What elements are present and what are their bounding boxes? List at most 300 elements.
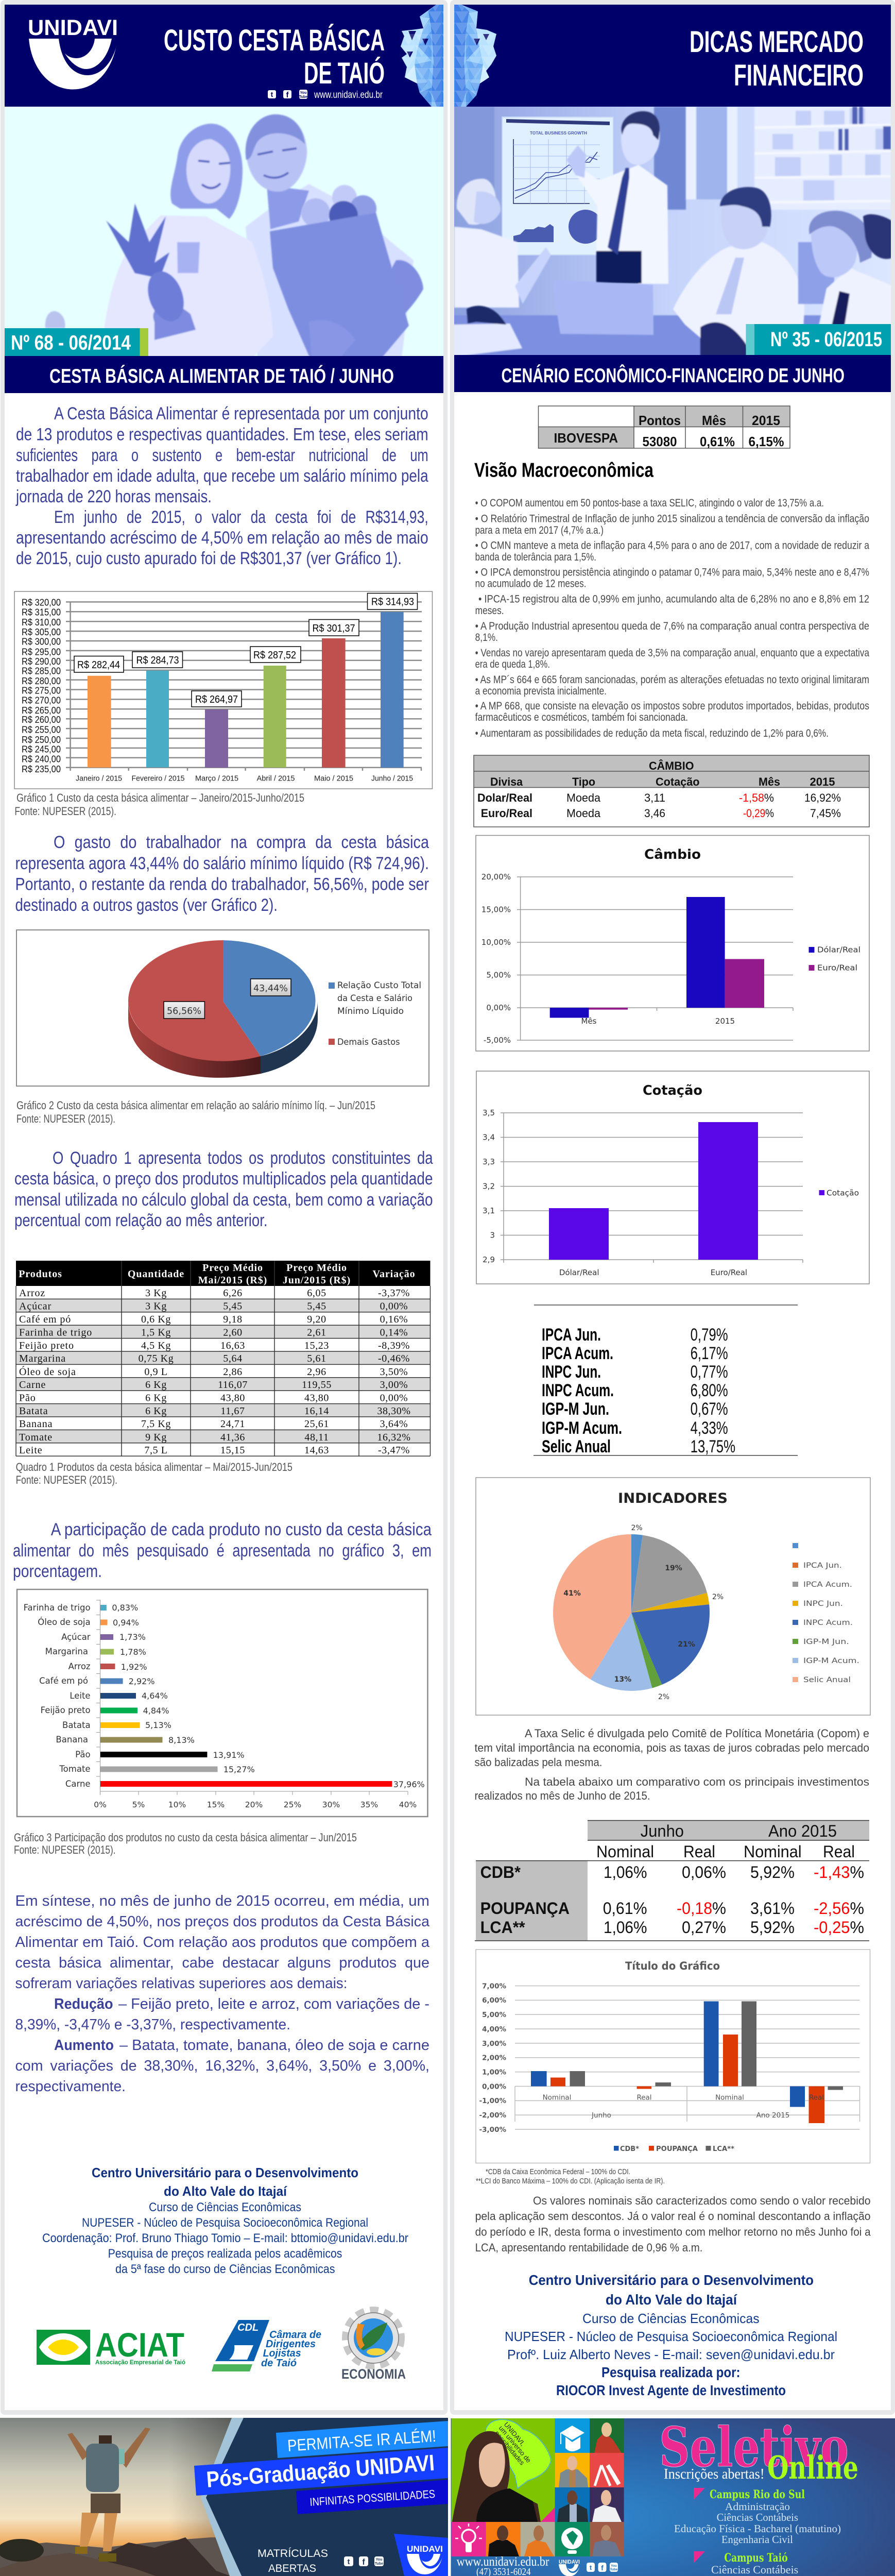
chart: indicadores pie: IGP-M Acum. (803, 1657, 859, 1665)
icons: social small: f (601, 2564, 604, 2572)
chart: custo da cesta básica: R$ 282,44 (77, 659, 120, 671)
table: investimentos: -2,56% (814, 1899, 864, 1918)
chart: participação dos produtos: 0,94% (113, 1618, 139, 1628)
social icons and site: Tube (299, 95, 307, 99)
logo: CDL: Lojistas (263, 2348, 301, 2359)
table: produtos da cesta básica: 0,14% (380, 1327, 408, 1338)
speech bubble: UNIDAVI, (503, 2420, 527, 2447)
text block: valores nominais: LCA, apresentando rentabilidade de 0,96 % a.m. (475, 2241, 702, 2254)
title: seletivo online: Online (767, 2449, 858, 2486)
text block: valores nominais: do período e IR, desta forma o investimento com melhor retorno no mês Junho foi a (475, 2226, 871, 2238)
table: produtos da cesta básica: -8,39% (378, 1340, 410, 1351)
chart: indicadores pie: 21% (678, 1640, 695, 1649)
logo: CDL: de Taió (261, 2358, 297, 2369)
table: câmbio: 3,11 (644, 791, 665, 804)
table: produtos da cesta básica: 6 Kg (145, 1392, 167, 1403)
credits right: RIOCOR Invest Agente de Investimento (556, 2382, 786, 2398)
text block: gasto do trabalhador: O gasto do trabalhador na compra da cesta básica (54, 833, 429, 852)
table: produtos da cesta básica: 41,36 (220, 1432, 245, 1443)
table: investimentos: 1,06% (604, 1918, 647, 1937)
table: produtos da cesta básica: Quantidade (128, 1268, 184, 1280)
chart: título do gráfico: 1,00% (482, 2068, 506, 2076)
text block: participação: A participação de cada produto no custo da cesta básica (51, 1520, 432, 1539)
text block: participação (13, 1520, 432, 1581)
logo: unidavi blue (394, 2534, 448, 2576)
chart: custo da cesta básica: R$ 315,00 (22, 607, 61, 617)
chart: participação dos produtos (17, 1589, 427, 1817)
credits left: Pesquisa de preços realizada pelos acadêmicos (108, 2247, 342, 2261)
table: produtos da cesta básica: Produtos (19, 1268, 62, 1280)
table: produtos da cesta básica: 24,71 (220, 1418, 245, 1430)
triangle mosaic right (454, 5, 496, 107)
text block: síntese: acréscimo de 4,50%, nos preços dos produtos da Cesta Básica (15, 1913, 430, 1930)
chart: participação dos produtos: Óleo de soja (38, 1617, 91, 1627)
text block: participação: alimentar do mês pesquisado é apresentada no gráfico 3, em (13, 1541, 432, 1561)
chart: título do gráfico: LCA** (713, 2145, 734, 2153)
chart: câmbio: 20,00% (481, 872, 511, 882)
table: produtos da cesta básica: 3 Kg (145, 1300, 167, 1312)
window and columns (454, 107, 737, 210)
heading: visão macroeconômica: Visão Macroeconômica (474, 460, 653, 481)
table: produtos da cesta básica: -3,47% (378, 1445, 410, 1456)
text block: gasto do trabalhador: representa agora 43,44% do salário mínimo líquido (R$ 724,96). (15, 854, 429, 873)
table: produtos da cesta básica: Jun/2015 (R$) (283, 1275, 351, 1286)
table: indicadores: 4,33% (691, 1418, 728, 1438)
big portrait (452, 2431, 555, 2522)
chart: participação dos produtos: 1,78% (120, 1647, 146, 1657)
caption: gráfico 3: Gráfico 3 Participação dos produtos no custo da cesta básica alimentar – Jun/2015 (14, 1831, 357, 1844)
campus taió: Ciências Contábeis (711, 2563, 798, 2576)
contact: www.unidavi.edu.br (457, 2555, 549, 2569)
table: câmbio: Moeda (566, 791, 601, 804)
text block: intro: de 13 produtos e respectivas quantidades. Em tese, eles seriam (16, 425, 428, 444)
triangle mosaic left (401, 5, 443, 107)
text block: valores nominais: pela aplicação sem descontos. Já o valor real é o nominal descontando a inflação (475, 2210, 871, 2223)
table: produtos da cesta básica: 5,61 (307, 1353, 326, 1364)
chart: indicadores pie: INPC Jun. (803, 1600, 843, 1608)
logo UNIDAVI: UNIDAVI (28, 15, 118, 40)
chart: participação dos produtos: 10% (168, 1800, 186, 1809)
campus rio do sul: Engenharia Civil (721, 2533, 793, 2546)
chart: participação dos produtos: Tomate (59, 1764, 91, 1774)
logo: ACIAT (37, 2326, 185, 2366)
chart: custo da cesta básica: R$ 295,00 (22, 647, 61, 657)
section heading (5, 356, 443, 393)
text block: quadro 1 (14, 1148, 433, 1230)
table: câmbio: Dolar/Real (477, 791, 532, 804)
chart: cotação: 3,2 (483, 1182, 495, 1191)
table: investimentos: 1,06% (604, 1863, 647, 1882)
text block: síntese: cesta básica alimentar, cabe destacar alguns produtos que (15, 1955, 429, 1971)
chart: cotação (476, 1071, 869, 1284)
text block: quadro 1: mensal utilizada no cálculo global da cesta, bem como a variação (14, 1190, 433, 1210)
table: produtos da cesta básica: 3,64% (380, 1418, 408, 1430)
table: produtos da cesta básica: 15,23 (304, 1340, 329, 1351)
table: produtos da cesta básica: Açúcar (19, 1300, 51, 1312)
credits right: Curso de Ciências Econômicas (582, 2311, 760, 2326)
table: produtos da cesta básica: 48,11 (304, 1432, 329, 1443)
bullet list: para a meta em 2017 (4,7% a.a.) (475, 524, 604, 536)
text block: intro: trabalhador em idade adulta, que recebe um salário mínimo pela (16, 466, 428, 486)
chart: cotação: 3,1 (483, 1206, 495, 1215)
credits left: Coordenação: Prof. Bruno Thiago Tomio – E-mail: bttomio@unidavi.edu.br (42, 2231, 408, 2245)
chart: cotação: 3,5 (483, 1108, 495, 1117)
chart: custo da cesta básica: Maio / 2015 (314, 774, 353, 783)
social icons and site (268, 90, 383, 100)
chart: título do gráfico: Real (636, 2094, 652, 2102)
table: ibovespa: 6,15% (749, 434, 784, 449)
chart: participação dos produtos: 4,64% (142, 1691, 168, 1701)
chart: título do gráfico: 6,00% (482, 1996, 506, 2005)
chart: título do gráfico (476, 1950, 870, 2163)
chart: custo da cesta básica: R$ 265,00 (22, 705, 61, 716)
chart: custo da cesta básica: R$ 300,00 (22, 637, 61, 647)
caption: quadro 1: Quadro 1 Produtos da cesta básica alimentar – Mai/2015-Jun/2015 (16, 1461, 292, 1473)
table: investimentos: Nominal (744, 1842, 802, 1861)
text: matrículas abertas: ABERTAS (268, 2563, 316, 2574)
table: produtos da cesta básica: Batata (19, 1405, 48, 1417)
chart: câmbio: Mês (581, 1016, 597, 1026)
table: indicadores: IPCA Jun. (542, 1325, 601, 1345)
table: produtos da cesta básica: Feijão preto (19, 1340, 74, 1351)
text block: síntese: sofreram variações relativas superiores aos demais: (15, 1975, 347, 1992)
icons: social (344, 2556, 384, 2567)
chart: título do gráfico: -3,00% (479, 2126, 506, 2134)
chart: participação dos produtos: Café em pó (39, 1676, 88, 1686)
caption: gráfico 1: Fonte: NUPESER (2015). (14, 805, 116, 818)
bullet list: a economia prevista inicialmente. (475, 685, 607, 697)
chart: participação dos produtos: Carne (65, 1779, 91, 1789)
icons: social: f (362, 2558, 365, 2567)
credits right: Pesquisa realizada por: (601, 2364, 741, 2380)
chart: custo da cesta básica: Fevereiro / 2015 (132, 774, 184, 783)
caption: gráfico 3 (14, 1831, 357, 1856)
text block: quadro 1: percentual com relação ao mês anterior. (14, 1211, 268, 1230)
text block: taxa selic: tem vital importância na economia, pois as taxas de juros cobradas pelo mercado (475, 1741, 869, 1754)
tile: compass (595, 2465, 619, 2486)
logo: CDL: Câmara de (269, 2329, 321, 2341)
table: produtos da cesta básica: 3,50% (380, 1366, 408, 1378)
chart: câmbio: -5,00% (484, 1036, 511, 1045)
chart: câmbio: 10,00% (481, 938, 511, 947)
chart: título do gráfico: POUPANÇA (656, 2145, 698, 2153)
table: indicadores: 0,79% (691, 1325, 728, 1345)
notes: *CDB da Caixa Econômica Federal – 100% do CDI. (486, 2167, 630, 2176)
bullet list: farmacêuticos e cosméticos, também foi sancionada. (475, 711, 688, 723)
credits left: Curso de Ciências Econômicas (149, 2200, 301, 2214)
logo: unidavi blue: UNIDAVI (407, 2544, 443, 2554)
table: produtos da cesta básica: 5,45 (307, 1300, 326, 1312)
contact (457, 2555, 549, 2576)
caption: gráfico 1 (14, 791, 304, 818)
chart: custo da cesta básica: R$ 280,00 (22, 676, 61, 686)
credits left (42, 2165, 408, 2276)
caption: gráfico 2: Fonte: NUPESER (2015). (16, 1112, 115, 1125)
chart: participação dos produtos: 13,91% (213, 1750, 245, 1760)
panel: custo cesta básica (5, 5, 443, 2410)
chart: título do gráfico: 4,00% (482, 2025, 506, 2033)
credits right: Centro Universitário para o Desenvolvimento (529, 2272, 814, 2288)
chart: participação dos produtos: 0% (94, 1800, 107, 1809)
table: câmbio: Cotação (656, 775, 699, 788)
social icons and site: www.unidavi.edu.br (314, 90, 383, 100)
chart: título do gráfico: Ano 2015 (756, 2111, 789, 2120)
credits left: do Alto Vale do Itajaí (164, 2183, 287, 2199)
logo UNIDAVI (28, 15, 118, 90)
bullet list: no acumulado de 12 meses. (475, 578, 586, 589)
banner: seletivo online (451, 2415, 895, 2576)
title: DE TAIÓ (304, 57, 385, 90)
table: produtos da cesta básica: Tomate (19, 1432, 53, 1443)
social icons and site: f (286, 91, 289, 99)
table: produtos da cesta básica: 3 Kg (145, 1287, 167, 1299)
chart: pizza salário mínimo: 56,56% (167, 1006, 201, 1016)
text block: síntese: – Feijão preto, leite e arroz, com variações de - (118, 1996, 429, 2012)
credits left: da 5ª fase do curso de Ciências Econômicas (115, 2262, 335, 2276)
flip chart (502, 117, 613, 255)
chart: cotação: 2,9 (483, 1255, 495, 1264)
chart: cotação: Cotação (827, 1188, 859, 1197)
chart: participação dos produtos: 25% (284, 1800, 301, 1809)
chart: participação dos produtos: Pão (75, 1750, 91, 1759)
chart: participação dos produtos: 8,13% (168, 1735, 195, 1745)
table: investimentos: 0,06% (682, 1863, 726, 1882)
chart: custo da cesta básica: R$ 270,00 (22, 696, 61, 706)
text block: síntese: – Batata, tomate, banana, óleo de soja e carne (119, 2037, 429, 2054)
chart: custo da cesta básica: R$ 310,00 (22, 617, 61, 628)
table: câmbio: -1,58% (739, 791, 774, 804)
table: investimentos: 5,92% (750, 1863, 795, 1882)
chart: indicadores pie: 41% (563, 1589, 581, 1598)
chart: participação dos produtos: 30% (322, 1800, 340, 1809)
text: matrículas abertas: MATRÍCULAS (257, 2548, 328, 2560)
table: investimentos (475, 1821, 869, 1941)
table: produtos da cesta básica: Pão (19, 1392, 36, 1403)
ribbon: infinitas possibilidades (296, 2480, 448, 2514)
banner: pós-graduação unidavi (0, 2418, 448, 2576)
table: indicadores: 6,80% (691, 1381, 728, 1400)
table: indicadores (533, 1305, 798, 1456)
chart: indicadores pie: INPC Acum. (803, 1619, 853, 1627)
chart: câmbio: 5,00% (486, 971, 511, 980)
table: produtos da cesta básica: Café em pó (19, 1314, 71, 1325)
bullet list: era de queda 1,8%. (475, 658, 550, 670)
chart: custo da cesta básica: R$ 301,37 (312, 623, 355, 634)
table: indicadores: 0,77% (691, 1362, 728, 1382)
chart: pizza salário mínimo (16, 930, 429, 1086)
table: investimentos: 3,61% (750, 1899, 795, 1918)
table: produtos da cesta básica: 7,5 Kg (141, 1418, 171, 1430)
woman at left (454, 179, 551, 308)
text block: intro (15, 404, 428, 568)
table: produtos da cesta básica: 43,80 (304, 1392, 329, 1403)
table: câmbio: -0,29% (743, 807, 774, 820)
icons: social: t (347, 2557, 350, 2566)
logo: CDL (212, 2320, 321, 2371)
table: produtos da cesta básica: 16,14 (304, 1405, 329, 1417)
logo: CDL: Dirigentes (266, 2338, 316, 2350)
text block: gasto do trabalhador: Portanto, o restante da renda do trabalhador, 56,56%, pode ser (15, 875, 429, 894)
text block: síntese: 8,39%, -3,47% e -3,37%, respectivamente. (15, 2016, 290, 2033)
text block: intro: suficientes para o sustento e bem-estar nutricional de um (16, 446, 428, 465)
text block: valores nominais (475, 2194, 871, 2254)
table: indicadores: IPCA Acum. (542, 1344, 613, 1363)
chart: custo da cesta básica: R$ 250,00 (22, 735, 61, 745)
title (690, 25, 864, 92)
badge: issue number right (746, 324, 891, 355)
bullet list: meses. (475, 605, 504, 617)
table: câmbio: 16,92% (804, 791, 841, 804)
caption: gráfico 2 (16, 1099, 375, 1125)
chart: indicadores pie: 2% (712, 1593, 724, 1601)
credits right: do Alto Vale do Itajaí (606, 2292, 737, 2308)
bullet list: banda de tolerância para 1,5%. (475, 551, 596, 563)
tile: globe (561, 2528, 583, 2554)
chart: título do gráfico: -2,00% (479, 2111, 506, 2120)
table: investimentos: CDB* (480, 1863, 521, 1882)
chart: participação dos produtos: Arroz (68, 1662, 91, 1671)
bullet list: • Aumentaram as possibilidades de redução da meta fiscal, reduzindo de 1,2% para 0,6%. (475, 727, 829, 739)
text: matrículas abertas (257, 2548, 328, 2574)
table: produtos da cesta básica: Margarina (19, 1353, 66, 1364)
logo: unidavi white: UNIDAVI (559, 2559, 580, 2565)
chart: participação dos produtos: 35% (360, 1800, 378, 1809)
chart: custo da cesta básica: R$ 287,52 (253, 650, 296, 661)
text block: taxa selic: realizados no mês de Junho de 2015. (475, 1789, 650, 1802)
credits right: Profº. Luiz Alberto Neves - E-mail: seven@unidavi.edu.br (507, 2347, 835, 2362)
table: produtos da cesta básica: Arroz (19, 1287, 45, 1299)
table: produtos da cesta básica: Variação (372, 1268, 416, 1280)
credits left: NUPESER - Núcleo de Pesquisa Socioeconômica Regional (82, 2216, 368, 2230)
chart: custo da cesta básica: R$ 235,00 (22, 764, 61, 774)
icons: social: Tube (375, 2562, 383, 2566)
table: indicadores: INPC Acum. (542, 1381, 614, 1400)
logo: CDL: CDL (237, 2322, 259, 2333)
chart: pizza salário mínimo: 43,44% (253, 983, 288, 994)
chart: indicadores pie: INDICADORES (618, 1490, 728, 1506)
man at right (798, 211, 893, 326)
table: produtos da cesta básica: 0,6 Kg (141, 1314, 171, 1325)
table: produtos da cesta básica: 9 Kg (145, 1432, 167, 1443)
table: indicadores: 13,75% (691, 1437, 735, 1456)
text block: taxa selic: Na tabela abaixo um comparativo com os principais investimentos (525, 1775, 869, 1788)
table: produtos da cesta básica: 0,9 L (144, 1366, 168, 1378)
chart: câmbio: 0,00% (486, 1003, 511, 1012)
table: investimentos: -1,43% (814, 1863, 864, 1882)
campus taió (694, 2551, 798, 2576)
table: produtos da cesta básica: 0,16% (380, 1314, 408, 1325)
text block: taxa selic: são balizadas pela mesma. (475, 1756, 603, 1769)
text block: síntese (15, 1893, 430, 2095)
text block: síntese: respectivamente. (15, 2078, 126, 2095)
social icons and site: t (271, 90, 273, 98)
flip chart: TOTAL BUSINESS GROWTH (530, 131, 587, 135)
table: indicadores: IGP-M Acum. (542, 1418, 622, 1438)
bullet list: 8,1%. (475, 632, 498, 643)
title (164, 24, 385, 90)
chart: custo da cesta básica: R$ 245,00 (22, 744, 61, 754)
chart: participação dos produtos: 1,73% (119, 1632, 146, 1642)
tile: graduation cap (560, 2426, 584, 2451)
table: câmbio: 3,46 (644, 807, 665, 820)
icons: social small (587, 2563, 618, 2572)
campus taió: Campus Taió (724, 2551, 788, 2565)
chart: participação dos produtos: Feijão preto (41, 1705, 91, 1715)
table: produtos da cesta básica: 6,05 (307, 1287, 326, 1299)
chart: câmbio: Euro/Real (817, 963, 857, 973)
icons: social small: You (611, 2564, 617, 2568)
text block: valores nominais: Os valores nominais são caracterizados como sendo o valor recebido (533, 2194, 871, 2207)
table: produtos da cesta básica: 9,20 (307, 1314, 326, 1325)
table: produtos da cesta básica: 15,15 (220, 1445, 245, 1456)
table: indicadores: IGP-M Jun. (542, 1399, 609, 1419)
table: produtos da cesta básica: 16,32% (377, 1432, 411, 1443)
photo: couple with groceries (5, 107, 443, 358)
table: câmbio: 7,45% (810, 807, 841, 820)
table: produtos da cesta básica: 6 Kg (145, 1405, 167, 1417)
chart: câmbio (476, 836, 869, 1051)
notes (476, 2167, 665, 2185)
header band right (454, 5, 891, 107)
campus rio do sul: Educação Física - Bacharel (matutino) (674, 2522, 841, 2535)
table: ibovespa: IBOVESPA (554, 430, 618, 446)
table: ibovespa: 0,61% (700, 434, 735, 449)
text block: taxa selic: A Taxa Selic é divulgada pelo Comitê de Política Monetária (Copom) e (525, 1727, 869, 1740)
chart: custo da cesta básica: R$ 260,00 (22, 715, 61, 725)
presenter (566, 111, 668, 284)
title: CUSTO CESTA BÁSICA (164, 24, 385, 57)
chart: título do gráfico: Nominal (543, 2094, 571, 2102)
table: investimentos: Nominal (596, 1842, 654, 1861)
table: investimentos: -0,25% (814, 1918, 864, 1937)
bookshelf (754, 107, 891, 210)
social icons and site: You (300, 91, 306, 95)
chart: cotação: 3,3 (483, 1157, 495, 1166)
table: produtos da cesta básica (16, 1261, 431, 1456)
chart: título do gráfico: 7,00% (482, 1982, 506, 1991)
text block: taxa selic (475, 1727, 869, 1802)
chart: custo da cesta básica: R$ 290,00 (22, 656, 61, 667)
chart: título do gráfico: 2,00% (482, 2054, 506, 2062)
table: produtos da cesta básica: Óleo de soja (19, 1365, 76, 1378)
title: seletivo online: Inscrições abertas! (664, 2466, 765, 2482)
table: investimentos: LCA** (480, 1918, 525, 1937)
chart: custo da cesta básica (14, 591, 433, 789)
credits right: NUPESER - Núcleo de Pesquisa Socioeconômica Regional (505, 2329, 837, 2344)
chart: pizza salário mínimo: da Cesta e Salário (337, 993, 412, 1003)
table: investimentos: 0,61% (603, 1899, 647, 1918)
portrait tiles (488, 2422, 622, 2556)
speech bubble: possibilidades (493, 2429, 526, 2467)
table: ibovespa (539, 406, 790, 449)
table: ibovespa: Pontos (639, 413, 681, 428)
text block: intro: jornada de 220 horas mensais. (15, 487, 212, 506)
chart: custo da cesta básica: R$ 285,00 (22, 666, 61, 676)
text block: quadro 1: cesta básica, o preço dos produtos multiplicados pela quantidade (14, 1169, 433, 1189)
chart: título do gráfico: Junho (591, 2111, 611, 2120)
table: produtos da cesta básica: 2,60 (223, 1327, 243, 1338)
chart: indicadores pie: 13% (614, 1675, 631, 1684)
table: investimentos: Real (683, 1842, 715, 1861)
logo: ACIAT: Associação Empresarial de Taió (95, 2359, 185, 2366)
table: câmbio: Moeda (566, 807, 601, 820)
table: investimentos: Junho (641, 1822, 684, 1840)
chart: participação dos produtos: Açúcar (61, 1632, 91, 1642)
mosaic: students (452, 2418, 624, 2556)
chart: indicadores pie: 19% (665, 1564, 682, 1572)
chart: participação dos produtos: 37,96% (393, 1780, 425, 1789)
chart: indicadores pie: IGP-M Jun. (803, 1638, 849, 1646)
